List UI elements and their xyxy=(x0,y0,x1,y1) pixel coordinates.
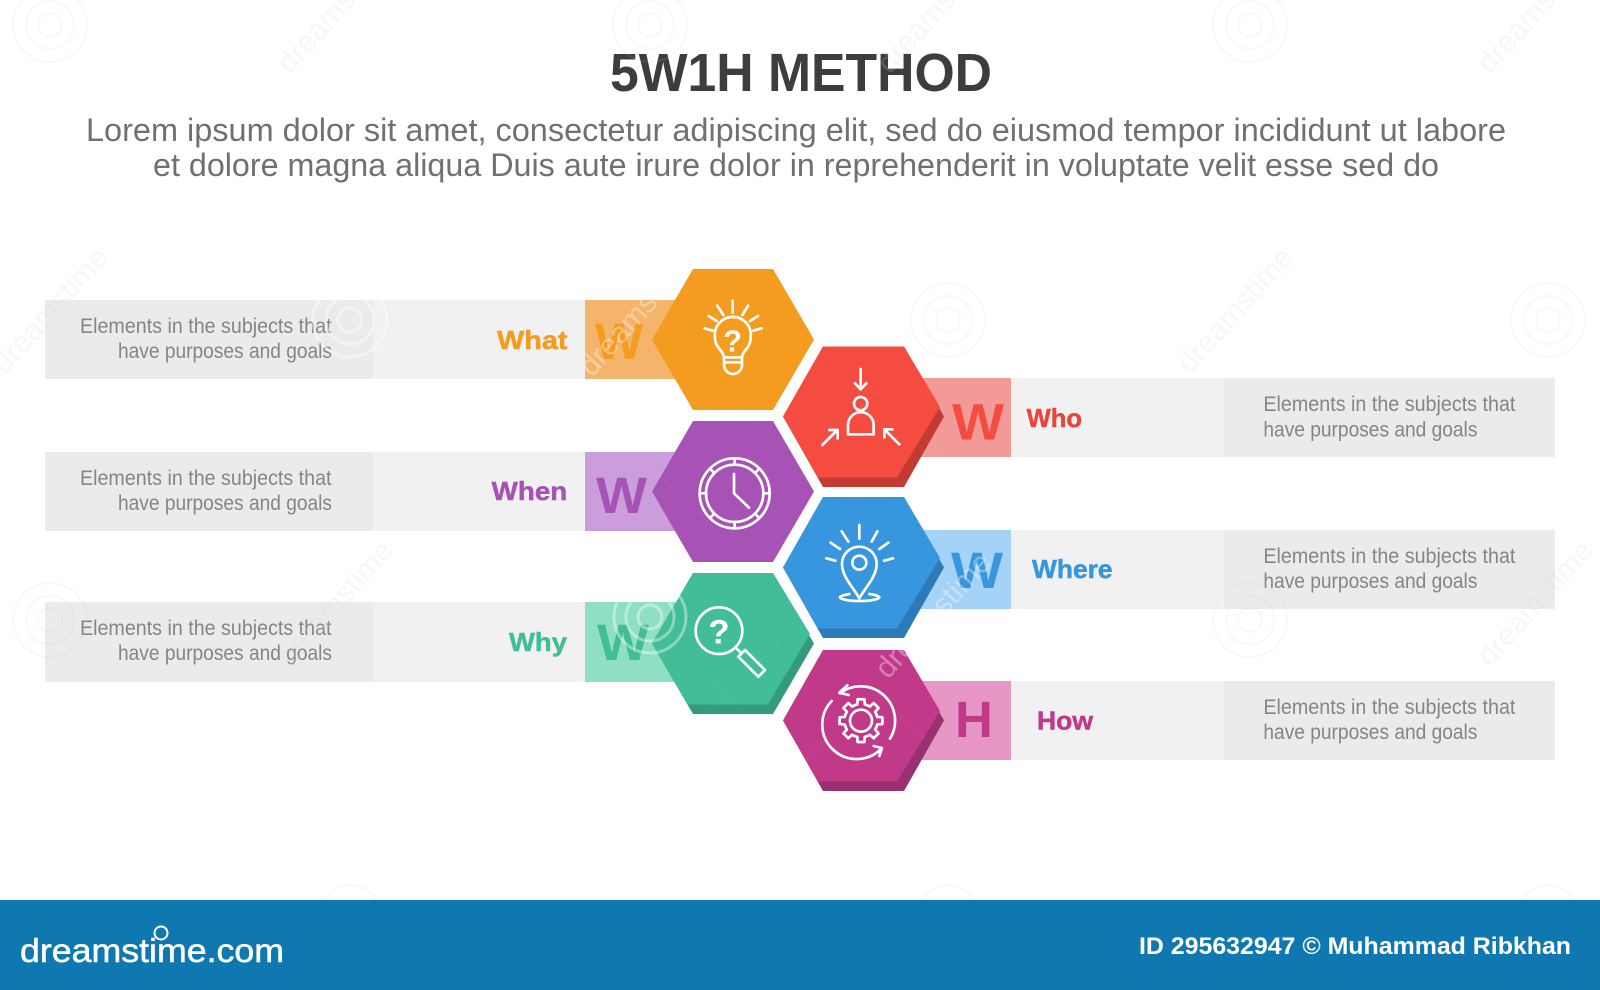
icon: gear with circular arrows xyxy=(822,685,895,759)
description: Who xyxy=(1263,393,1516,442)
icon: magnifier with question mark: ? xyxy=(708,613,730,651)
watermark: dreamstime xyxy=(573,244,702,383)
label: Where: Where xyxy=(1032,554,1112,584)
icon: clock xyxy=(700,458,770,528)
panel: When xyxy=(45,421,814,562)
footer credit: ID 295632947 © Muhammad Ribkhan xyxy=(1139,933,1571,960)
footer logo: dreamstime.com xyxy=(20,932,284,969)
description: When: have purposes and goals xyxy=(118,492,332,515)
hexagon: How xyxy=(783,650,944,791)
description: Why: have purposes and goals xyxy=(118,642,332,665)
description: Who: have purposes and goals xyxy=(1263,418,1477,442)
description: How xyxy=(1263,696,1516,744)
letter W: Who: W xyxy=(952,394,1005,450)
label: Why: Why xyxy=(509,627,568,657)
subtitle text block: Lorem ipsum dolor sit amet, consectetur adipiscing elit, sed do eiusmod tempor incididunt ut labore xyxy=(86,112,1506,148)
hexagon: When xyxy=(652,421,814,562)
hexagon: Who xyxy=(783,346,944,487)
panel: What xyxy=(45,269,814,410)
description: When xyxy=(80,467,332,515)
icon: magnifier with question mark xyxy=(696,607,765,677)
description: How: Elements in the subjects that xyxy=(1263,696,1516,719)
description: Where: Elements in the subjects that xyxy=(1263,545,1516,568)
description: Why xyxy=(80,617,332,665)
hexagon: What xyxy=(652,269,814,410)
description: Who: Elements in the subjects that xyxy=(1263,393,1516,416)
hexagon: Why xyxy=(652,573,814,714)
description: What xyxy=(80,315,332,363)
title: 5W1H METHOD xyxy=(610,43,992,103)
description: How: have purposes and goals xyxy=(1263,721,1477,744)
description: Where xyxy=(1263,545,1516,593)
description: When: Elements in the subjects that xyxy=(80,467,332,490)
watermark: dreamstime xyxy=(1471,534,1600,673)
letter W: Why: W xyxy=(597,614,650,671)
subtitle text block xyxy=(86,112,1506,183)
panel: Where xyxy=(783,497,1555,638)
panel: Who xyxy=(783,346,1555,487)
watermark: dreamstime xyxy=(1171,241,1300,380)
hexagon: Where xyxy=(783,497,944,638)
watermark: dreamstime xyxy=(271,534,400,673)
description: Why: Elements in the subjects that xyxy=(80,617,332,640)
footer bar xyxy=(0,900,1600,990)
icon: light bulb with question mark xyxy=(705,301,761,374)
description: What: Elements in the subjects that xyxy=(80,315,332,338)
label: Who: Who xyxy=(1027,403,1082,433)
label: What: What xyxy=(497,325,568,355)
label: When: When xyxy=(492,476,567,506)
description: Where: have purposes and goals xyxy=(1263,570,1477,593)
letter W: What: W xyxy=(595,313,644,370)
icon: location pin with rays xyxy=(826,525,893,601)
panel: How xyxy=(783,650,1555,791)
letter H: How: H xyxy=(955,691,993,748)
watermark: dreamstime xyxy=(869,546,998,685)
letter W: When: W xyxy=(596,467,648,524)
panel: Why xyxy=(45,573,814,714)
letter W: Where: W xyxy=(951,542,1004,599)
subtitle text block: et dolore magna aliqua Duis aute irure dolor in reprehenderit in voluptate velit esse sed do xyxy=(153,147,1439,183)
icon: person with arrows xyxy=(822,369,899,445)
description: What: have purposes and goals xyxy=(118,340,332,363)
icon: light bulb with question mark: ? xyxy=(723,325,742,359)
label: How: How xyxy=(1037,706,1094,736)
